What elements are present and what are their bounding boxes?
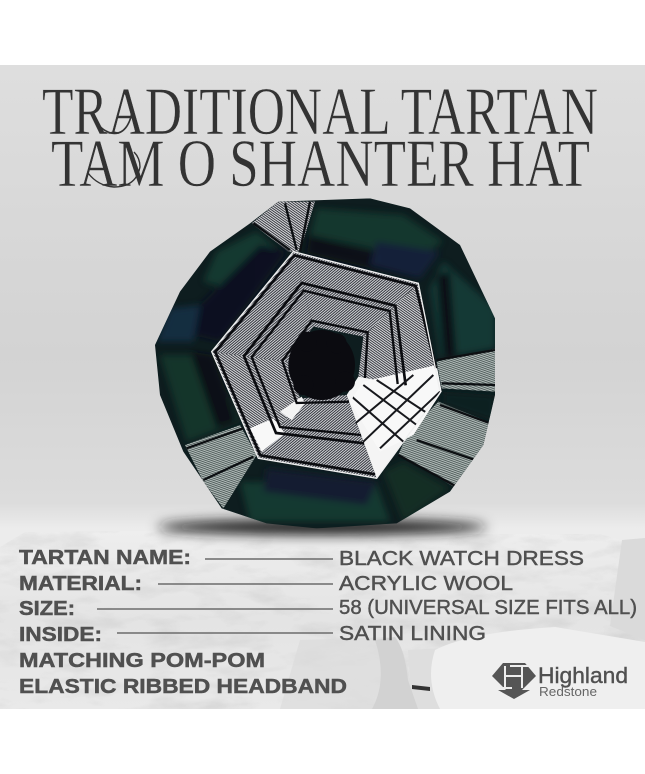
spec row: material: MATERIAL: <box>19 573 142 595</box>
white panel cross lines <box>350 375 440 448</box>
tartan panels <box>293 252 418 337</box>
spec row: inside: INSIDE: <box>19 624 102 646</box>
logo: Highland Redstone: Redstone <box>539 684 597 699</box>
logo: Highland Redstone: Highland <box>538 663 628 688</box>
spec row: inside: SATIN LINING <box>339 623 486 645</box>
ring lines <box>215 255 436 474</box>
hat outer green cloth <box>150 195 497 532</box>
title <box>42 73 598 201</box>
spec row: size: 58 (UNIVERSAL SIZE FITS ALL) <box>339 597 637 619</box>
spec row: tartan name <box>19 547 584 570</box>
tartan radial bands <box>252 202 315 252</box>
spec row: size <box>19 597 637 620</box>
spec row: size: SIZE: <box>19 598 75 620</box>
feature: elastic ribbed headband: ELASTIC RIBBED HEADBAND <box>19 676 347 698</box>
rock base <box>0 530 645 709</box>
spec row: inside <box>19 623 486 646</box>
white squares <box>250 418 285 452</box>
pom-pom <box>288 330 355 400</box>
spec row: tartan name: BLACK WATCH DRESS <box>339 548 584 570</box>
spec row: material <box>19 573 513 595</box>
feature: matching pom-pom: MATCHING POM-POM <box>19 650 265 672</box>
hat shadow <box>157 519 487 535</box>
tartan hat <box>150 195 497 532</box>
spec row: material: ACRYLIC WOOL <box>339 573 513 595</box>
logo: Highland Redstone <box>492 663 628 699</box>
spec row: tartan name: TARTAN NAME: <box>19 547 191 569</box>
